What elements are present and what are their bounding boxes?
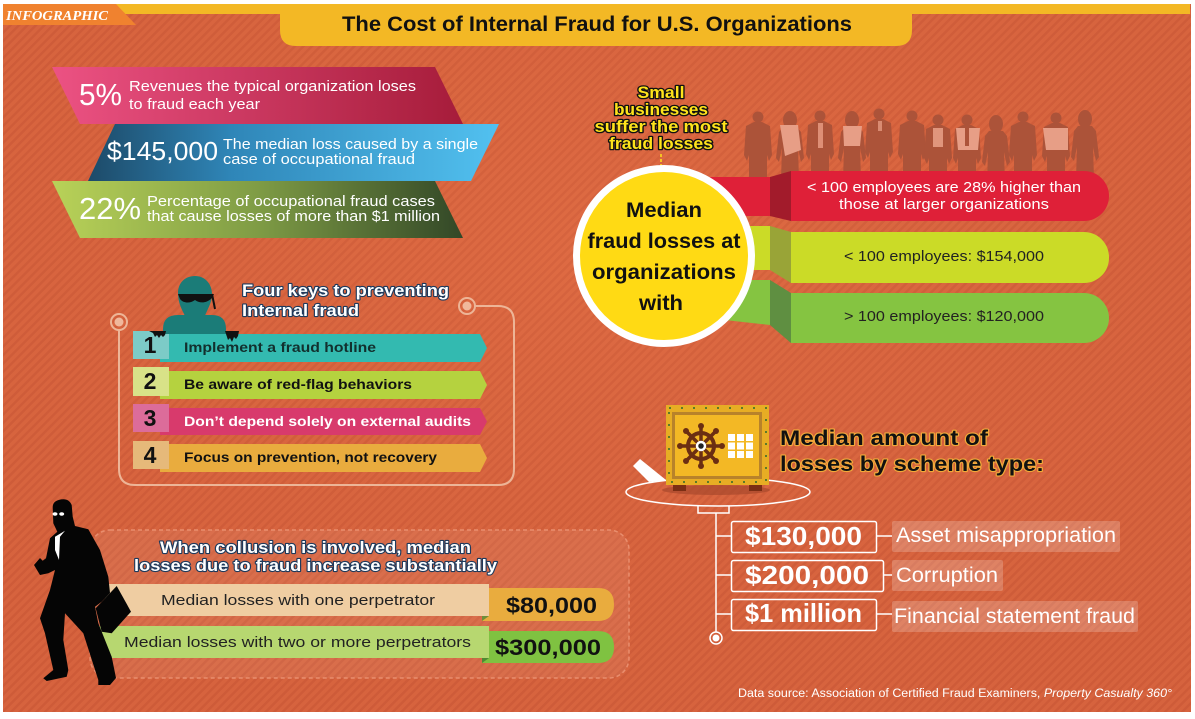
bar: under 100 employees 28% higher bbox=[700, 171, 1109, 221]
stat ribbon: 22%: 22% bbox=[79, 191, 141, 226]
scheme: financial statement fraud: Financial statement fraud bbox=[894, 605, 1135, 628]
infographic tag: INFOGRAPHIC bbox=[5, 9, 109, 24]
scheme tree connector bbox=[698, 506, 892, 644]
icon: man with briefcase bbox=[34, 499, 131, 685]
heading: four keys bbox=[242, 281, 449, 320]
panel: collusion bbox=[90, 530, 629, 678]
stat ribbon: 22% bbox=[52, 181, 463, 238]
bar: over 100 employees $120,000: > 100 employees: $120,000 bbox=[844, 308, 1044, 325]
key 4 bbox=[133, 441, 487, 472]
circle: median fraud losses: Median bbox=[626, 199, 702, 222]
icon: safe bbox=[626, 405, 810, 506]
circle: median fraud losses: with bbox=[638, 292, 683, 315]
key 4: 4 bbox=[144, 442, 157, 468]
key 2: 2 bbox=[144, 368, 156, 394]
heading: four keys: Four keys to preventing bbox=[242, 281, 449, 300]
bar: under 100 employees 28% higher: < 100 employees are 28% higher than bbox=[807, 179, 1081, 196]
bar: over 100 employees $120,000 bbox=[725, 280, 1109, 343]
scheme: corruption: Corruption bbox=[896, 564, 998, 587]
key 2: Be aware of red-flag behaviors bbox=[184, 376, 412, 392]
icon: masked thief bbox=[149, 276, 239, 342]
title banner bbox=[280, 13, 912, 46]
row: two or more perpetrators bbox=[93, 626, 614, 663]
callout: small businesses: businesses bbox=[614, 101, 708, 119]
stat ribbon: 22%: that cause losses of more than $1 million bbox=[147, 208, 440, 225]
key 3 bbox=[133, 404, 487, 435]
stat ribbon: $145,000 bbox=[88, 124, 499, 181]
heading: scheme type: losses by scheme type: bbox=[780, 453, 1044, 476]
bar: under 100 employees $154,000: < 100 employees: $154,000 bbox=[844, 248, 1044, 265]
stat ribbon: 5% bbox=[52, 67, 463, 124]
stat ribbon: 5%: Revenues the typical organization loses bbox=[129, 78, 416, 95]
key 2 bbox=[133, 367, 487, 399]
data source: Data source: Association of Certified Fraud Examiners, Property Casualty 360° bbox=[738, 688, 1172, 700]
bar: under 100 employees $154,000 bbox=[730, 226, 1109, 283]
scheme: corruption: $200,000 bbox=[745, 560, 869, 590]
callout: small businesses: Small bbox=[638, 84, 684, 102]
scheme: asset misappropriation bbox=[732, 521, 1120, 552]
callout: small businesses: fraud losses bbox=[609, 135, 713, 153]
circle: median fraud losses: fraud losses at bbox=[588, 230, 740, 253]
panel: four keys bbox=[111, 276, 514, 485]
title: The Cost of Internal Fraud for U.S. Organizations bbox=[342, 13, 852, 36]
top gold bar bbox=[116, 4, 1190, 14]
scheme: asset misappropriation: Asset misappropriation bbox=[896, 524, 1116, 547]
stat ribbon: $145,000: case of occupational fraud bbox=[223, 151, 415, 168]
circle: median fraud losses: organizations bbox=[592, 261, 736, 284]
infographic tag bbox=[3, 4, 136, 25]
stat ribbon: $145,000: The median loss caused by a single bbox=[223, 136, 478, 153]
key 1: 1 bbox=[144, 332, 157, 358]
circle: median fraud losses bbox=[576, 168, 752, 344]
key 1: Implement a fraud hotline bbox=[184, 339, 376, 355]
key 3: 3 bbox=[144, 405, 156, 431]
heading: collusion: losses due to fraud increase substantially bbox=[134, 556, 498, 575]
crowd silhouettes bbox=[744, 108, 1099, 184]
heading: collusion bbox=[134, 538, 498, 575]
row: one perpetrator bbox=[105, 584, 614, 621]
scheme: financial statement fraud: $1 million bbox=[745, 598, 862, 628]
scheme: corruption bbox=[732, 560, 1003, 592]
row: one perpetrator: $80,000 bbox=[506, 593, 597, 618]
key 4: Focus on prevention, not recovery bbox=[184, 449, 437, 465]
stat ribbon: $145,000: $145,000 bbox=[107, 136, 218, 166]
scheme: asset misappropriation: $130,000 bbox=[745, 521, 862, 551]
callout: small businesses: suffer the most bbox=[594, 118, 728, 136]
key 3: Don’t depend solely on external audits bbox=[184, 413, 471, 429]
callout: small businesses bbox=[594, 84, 728, 168]
bar: under 100 employees 28% higher: those at larger organizations bbox=[839, 196, 1049, 213]
key 1 bbox=[133, 331, 487, 362]
heading: collusion: When collusion is involved, median bbox=[160, 538, 471, 557]
stat ribbon: 5%: 5% bbox=[79, 77, 122, 112]
row: two or more perpetrators: $300,000 bbox=[495, 635, 601, 660]
row: one perpetrator: Median losses with one perpetrator bbox=[161, 592, 435, 609]
stat ribbon: 5%: to fraud each year bbox=[129, 96, 260, 113]
heading: scheme type bbox=[780, 427, 1044, 476]
heading: scheme type: Median amount of bbox=[780, 427, 989, 450]
row: two or more perpetrators: Median losses with two or more perpetrators bbox=[124, 634, 471, 651]
heading: four keys: Internal fraud bbox=[242, 301, 359, 320]
stat ribbon: 22%: Percentage of occupational fraud cases bbox=[147, 193, 435, 210]
scheme: financial statement fraud bbox=[732, 598, 1138, 632]
